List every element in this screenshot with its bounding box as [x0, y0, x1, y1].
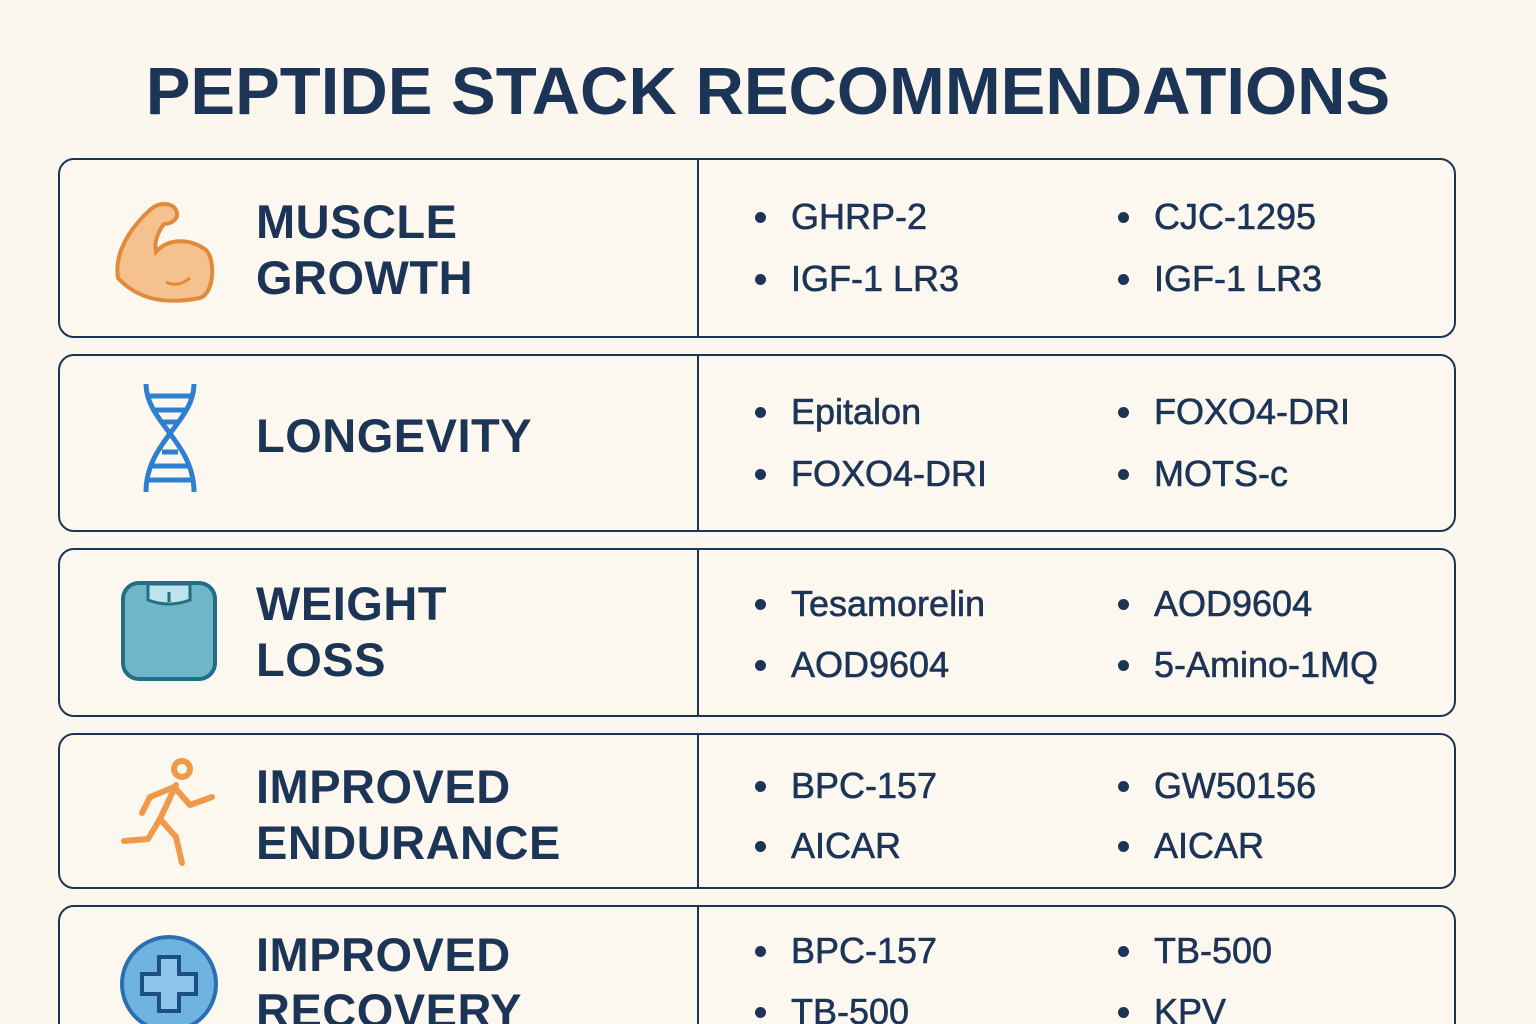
panel: muscle growth: IGF-1 LR3	[791, 258, 959, 299]
panel: longevity: MOTS-c	[1154, 453, 1288, 494]
icon: medical cross	[120, 935, 218, 1024]
panel: weight loss: AOD9604	[791, 644, 949, 685]
list	[755, 196, 1322, 299]
panel: muscle growth: GHRP-2	[791, 196, 927, 237]
label: IMPROVED	[256, 760, 511, 813]
panel: improved endurance: AICAR	[1154, 825, 1264, 866]
panel: muscle growth: IGF-1 LR3	[1154, 258, 1322, 299]
list	[755, 583, 1378, 685]
panel: improved recovery: TB-500	[1154, 930, 1272, 971]
panel: weight loss: Tesamorelin	[791, 583, 985, 624]
list	[755, 765, 1316, 866]
label: IMPROVED	[256, 928, 511, 981]
panel: improved endurance: GW50156	[1154, 765, 1316, 806]
panel: improved endurance: AICAR	[791, 825, 901, 866]
label: MUSCLE	[256, 195, 457, 248]
title: PEPTIDE STACK RECOMMENDATIONS	[146, 54, 1390, 129]
label	[256, 577, 447, 686]
list	[755, 391, 1350, 494]
label: LOSS	[256, 633, 386, 686]
label	[256, 928, 522, 1024]
panel: weight loss: 5-Amino-1MQ	[1154, 644, 1378, 685]
panel: improved recovery: BPC-157	[791, 930, 937, 971]
panel: longevity: Epitalon	[791, 391, 921, 432]
label: LONGEVITY	[256, 409, 532, 462]
label: GROWTH	[256, 251, 473, 304]
label: WEIGHT	[256, 577, 447, 630]
label	[256, 760, 561, 869]
icon: scale	[121, 581, 217, 681]
panel: improved recovery	[58, 905, 1456, 1024]
list	[755, 930, 1272, 1024]
panel: longevity: FOXO4-DRI	[791, 453, 987, 494]
panel: longevity	[58, 354, 1456, 532]
icon: dna	[144, 384, 196, 492]
panel: improved endurance	[58, 733, 1456, 889]
icon: flexed arm	[115, 202, 214, 303]
label: ENDURANCE	[256, 816, 561, 869]
panel: improved endurance: BPC-157	[791, 765, 937, 806]
panel: weight loss	[58, 548, 1456, 717]
icon: runner	[121, 758, 215, 866]
label	[256, 195, 473, 304]
panel: longevity: FOXO4-DRI	[1154, 391, 1350, 432]
panel: weight loss: AOD9604	[1154, 583, 1312, 624]
panel: muscle growth: CJC-1295	[1154, 196, 1316, 237]
panel: muscle growth	[58, 158, 1456, 338]
